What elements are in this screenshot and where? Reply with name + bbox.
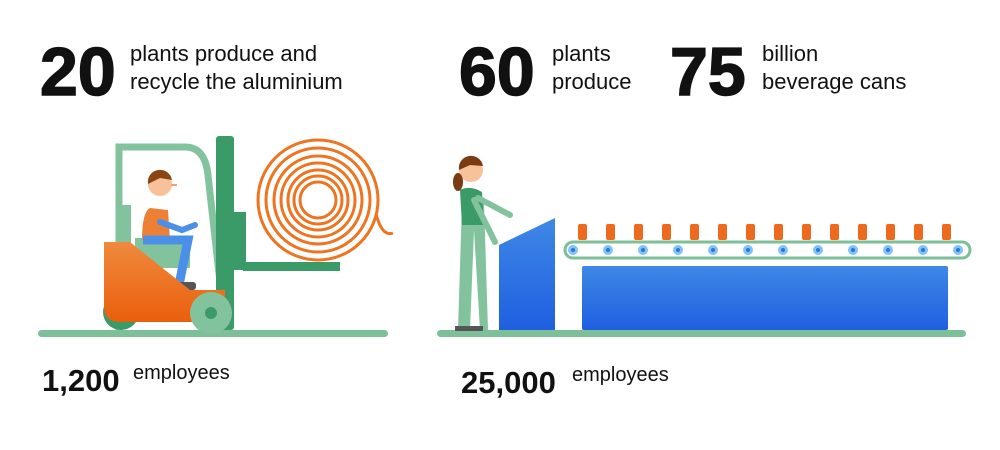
stat: 75 billion bbox=[670, 34, 906, 110]
machine bbox=[499, 218, 555, 330]
employees: 25,000 bbox=[461, 364, 669, 400]
illustration: worker at conveyor bbox=[437, 156, 970, 337]
stat: 75 billion: billion bbox=[762, 41, 818, 66]
stat: 60 plants bbox=[459, 34, 632, 110]
worker bbox=[458, 203, 488, 330]
employees: 25,000: 25,000 bbox=[461, 365, 556, 400]
stat: 20 plants: plants produce and bbox=[130, 41, 317, 66]
driver bbox=[135, 238, 190, 268]
coil bbox=[258, 140, 393, 260]
conveyor bbox=[565, 242, 970, 258]
stat: 20 plants: 20 bbox=[40, 34, 116, 110]
employees: 1,200: 1,200 bbox=[42, 363, 120, 398]
employees: 1,200: employees bbox=[133, 362, 230, 384]
stat: 75 billion: beverage cans bbox=[762, 69, 906, 94]
illustration: forklift with coil bbox=[38, 136, 393, 337]
stat: 75 billion: 75 bbox=[670, 34, 746, 110]
stat: 60 plants: 60 bbox=[459, 34, 535, 110]
employees: 1,200 bbox=[42, 362, 230, 398]
stat: 20 plants bbox=[40, 34, 343, 110]
stat: 20 plants: recycle the aluminium bbox=[130, 69, 343, 94]
employees: 25,000: employees bbox=[572, 364, 669, 386]
stat: 60 plants: produce bbox=[552, 69, 632, 94]
stat: 60 plants: plants bbox=[552, 41, 611, 66]
body bbox=[103, 294, 139, 330]
